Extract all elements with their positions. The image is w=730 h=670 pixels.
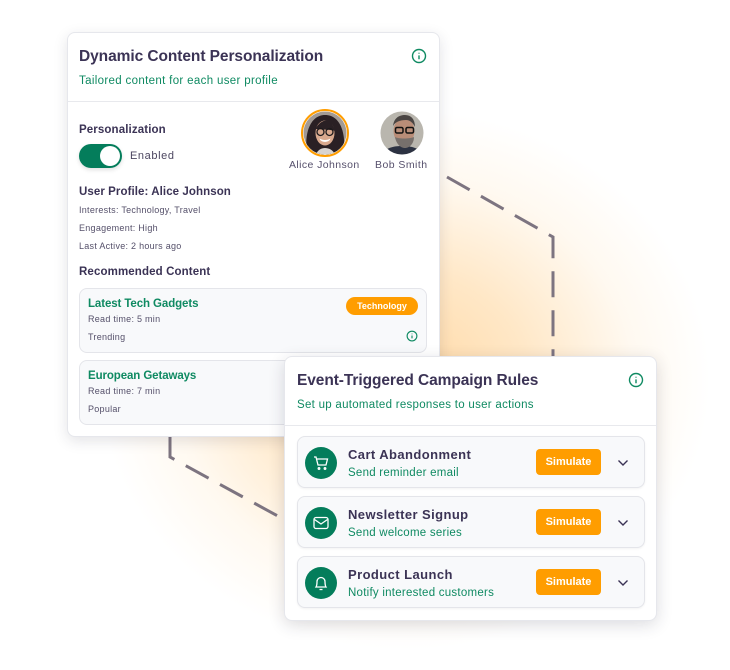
personalization label: Personalization	[79, 124, 166, 136]
heading: Event-Triggered Campaign Rules	[297, 372, 538, 389]
item title: Latest Tech Gadgets	[88, 298, 198, 310]
rule title: Cart Abandonment	[348, 447, 471, 462]
avatar: Bob Smith	[375, 112, 428, 171]
read time: Read time: 7 min	[88, 386, 160, 396]
tag: Popular	[88, 404, 121, 414]
subtitle: Set up automated responses to user actions	[297, 399, 534, 411]
rule title: Newsletter Signup	[348, 507, 469, 522]
icon: chevron	[618, 520, 628, 526]
simulate button: Simulate	[546, 456, 591, 468]
rule description: Send reminder email	[348, 467, 459, 479]
last active: Last Active: 2 hours ago	[79, 241, 182, 251]
icon: info	[412, 48, 426, 64]
read time: Read time: 5 min	[88, 314, 160, 324]
panel: event-triggered campaign rules	[284, 356, 657, 621]
simulate button	[536, 449, 601, 475]
rule description: Notify interested customers	[348, 587, 494, 599]
badge: technology: Technology	[357, 301, 407, 311]
simulate button	[536, 509, 601, 535]
content card: Latest Tech Gadgets	[79, 288, 427, 353]
icon: bell	[305, 567, 337, 599]
profile heading: User Profile: Alice Johnson	[79, 186, 231, 198]
recommended heading: Recommended Content	[79, 266, 210, 278]
icon: info	[406, 330, 418, 342]
simulate button: Simulate	[546, 516, 591, 528]
background glow	[100, 110, 710, 650]
tag: Trending	[88, 332, 125, 342]
enabled label: Enabled	[130, 150, 175, 162]
avatar: Alice Johnson	[289, 109, 360, 171]
panel: dynamic content personalization	[67, 32, 440, 437]
interests: Interests: Technology, Travel	[79, 205, 201, 215]
icon: chevron	[618, 580, 628, 586]
toggle	[79, 144, 122, 168]
icon: mail	[305, 507, 337, 539]
badge: technology	[346, 297, 418, 315]
icon: cart	[305, 447, 337, 479]
subtitle: Tailored content for each user profile	[79, 75, 278, 87]
engagement: Engagement: High	[79, 223, 158, 233]
icon: chevron	[618, 460, 628, 466]
name: Alice Johnson	[289, 159, 360, 171]
simulate button: Simulate	[546, 576, 591, 588]
icon: info	[628, 372, 644, 388]
item title: European Getaways	[88, 370, 196, 382]
simulate button	[536, 569, 601, 595]
heading: Dynamic Content Personalization	[79, 48, 323, 65]
rule description: Send welcome series	[348, 527, 462, 539]
rule: product launch	[297, 556, 645, 608]
rule: newsletter signup	[297, 496, 645, 548]
name: Bob Smith	[375, 159, 428, 171]
user profile block	[79, 186, 231, 251]
rule: cart abandonment	[297, 436, 645, 488]
content card: European Getaways	[79, 360, 427, 425]
rule title: Product Launch	[348, 567, 453, 582]
